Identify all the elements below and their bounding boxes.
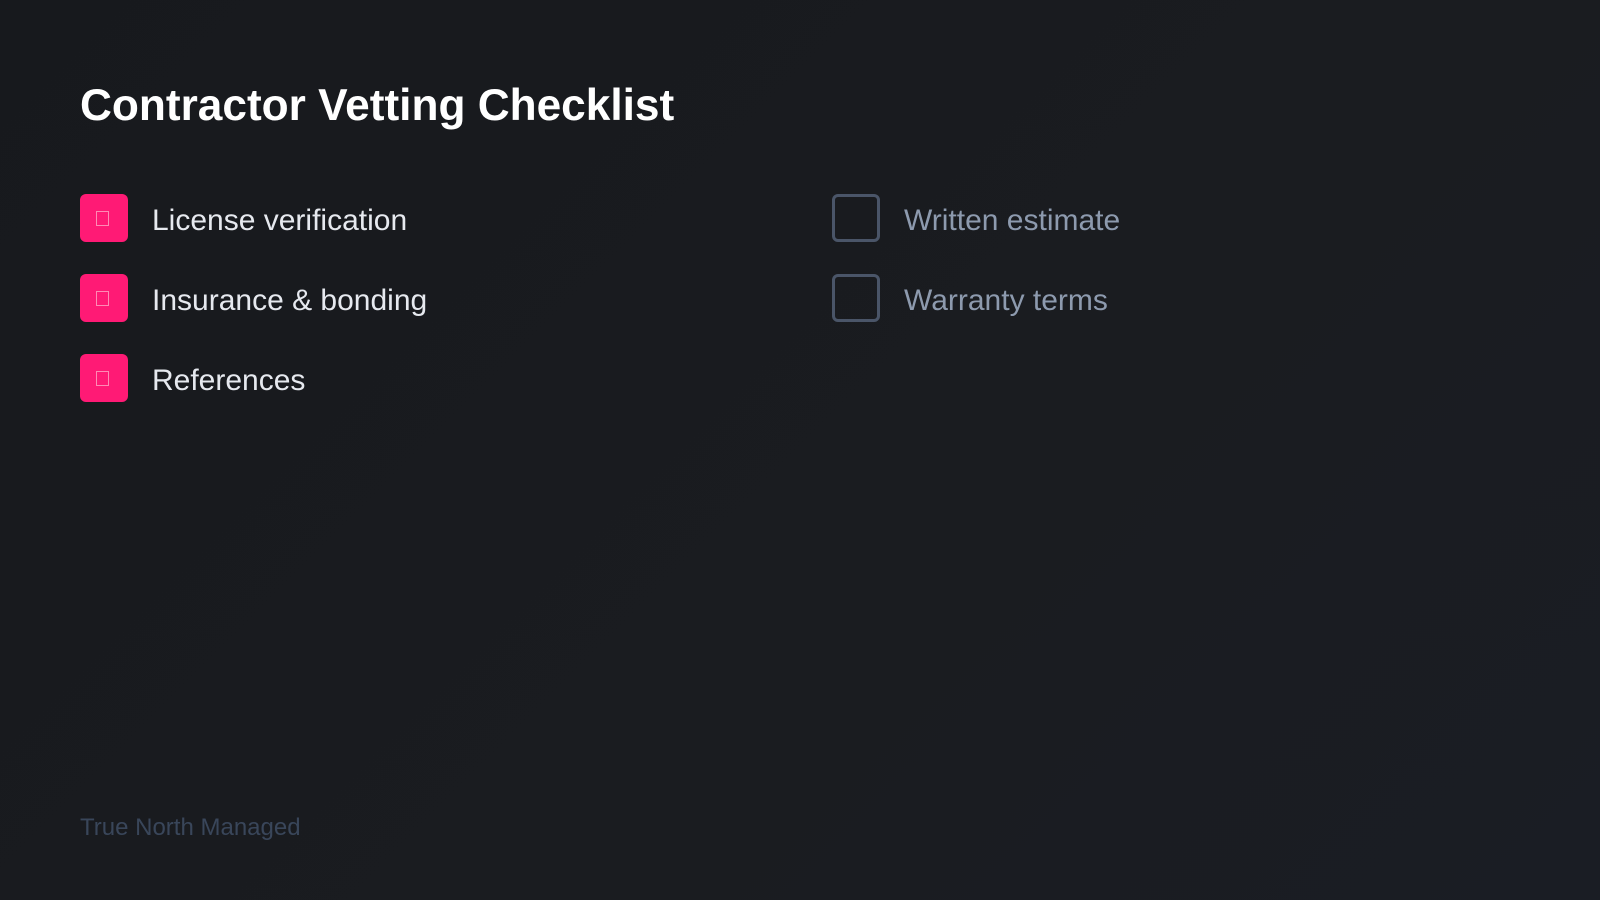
item: License verification — [80, 194, 407, 242]
footer: True North Managed — [80, 814, 301, 841]
item: References — [80, 354, 305, 402]
item: Warranty terms: Warranty terms — [904, 284, 1108, 317]
item: Written estimate — [832, 194, 1120, 242]
title: Contractor Vetting Checklist — [80, 81, 674, 130]
item: Insurance & bonding — [80, 274, 427, 322]
item: Warranty terms — [832, 274, 1108, 322]
item: Insurance & bonding: Insurance & bonding — [152, 284, 427, 317]
item: References: References — [152, 364, 305, 397]
item: Written estimate: Written estimate — [904, 204, 1120, 237]
item: License verification: License verification — [152, 204, 407, 237]
